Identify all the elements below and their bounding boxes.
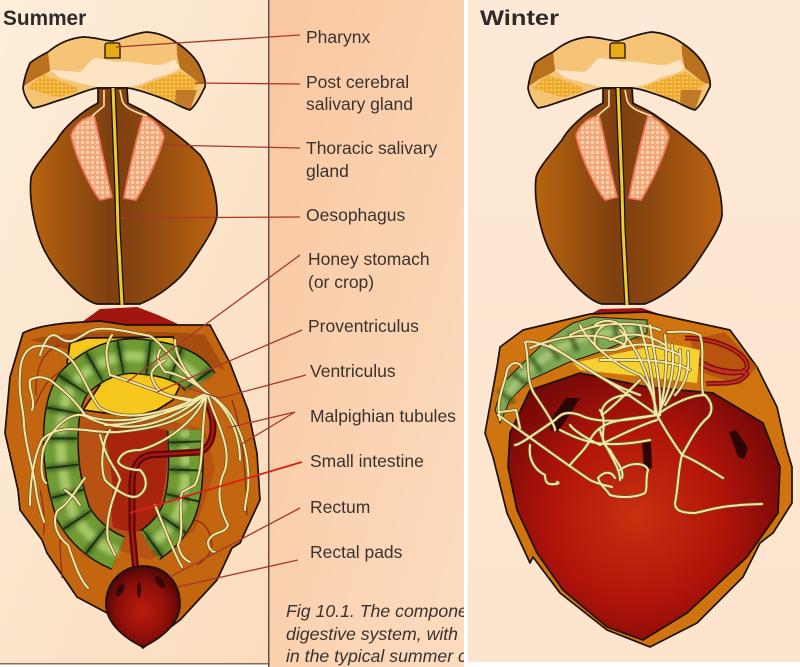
abdomen outer wall [5,321,260,648]
labels: salivary gland [306,94,413,114]
labels [306,27,456,562]
labels: Ventriculus [310,361,396,381]
labels: (or crop) [308,272,374,292]
tracheal vessels [35,345,247,578]
abdomen outer wall [485,312,792,647]
small intestine [132,403,213,572]
diagram: summer abdomen [5,307,260,648]
labels: Malpighian tubules [310,406,456,426]
labels: Oesophagus [306,205,405,225]
labels: Pharynx [306,27,370,47]
diagram: winter Malpighian tubules [498,321,762,513]
diagram: winter head and thorax [528,32,722,305]
labels: Proventriculus [308,316,419,336]
labels: gland [306,161,349,181]
ventriculus [61,356,200,553]
figure caption [286,604,464,666]
labels: Small intestine [310,451,424,471]
rectal pads [114,574,167,598]
figure caption: in the typical summer c [286,646,467,666]
diagram: winter abdomen [485,308,792,647]
figure caption: digestive system, with [286,624,458,644]
rectal sac [106,566,180,647]
labels: Post cerebral [306,72,409,92]
leader lines [116,35,306,587]
ventriculus compressed [495,317,647,423]
rectal pads [550,398,748,470]
labels: Rectum [310,497,370,517]
honey stomach compressed [573,343,700,383]
figure caption: Fig 10.1. The component [286,601,484,621]
heading: Summer: Summer [3,7,86,30]
small intestine coils [685,338,747,384]
labels: Honey stomach [308,249,430,269]
diagram: summer Malpighian tubules [20,329,248,588]
diagram: summer head and thorax [23,32,217,305]
distended rectum [508,373,780,640]
labels: Thoracic salivary [306,138,438,158]
heading: Winter: Winter [480,6,560,30]
honey stomach [67,337,188,417]
labels: Rectal pads [310,542,403,562]
